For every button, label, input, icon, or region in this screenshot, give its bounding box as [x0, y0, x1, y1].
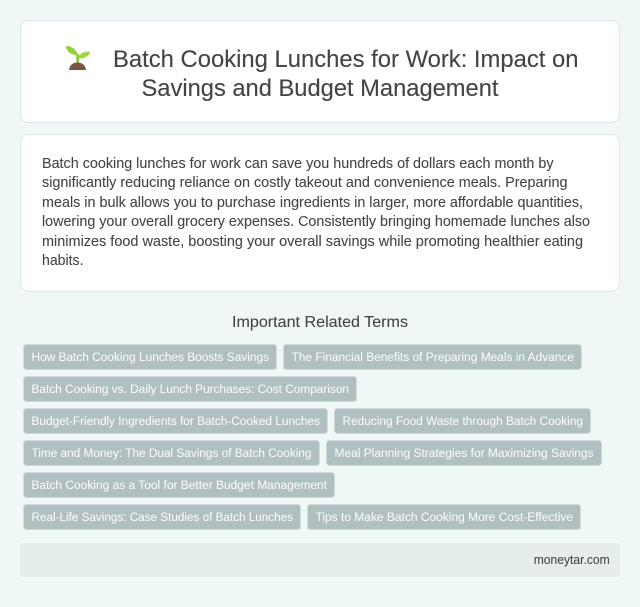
tag: Budget-Friendly Ingredients for Batch-Cooked Lunches [32, 414, 320, 428]
panel: summary card [20, 134, 620, 291]
summary paragraph: Batch cooking lunches for work can save you hundreds of dollars each month by [42, 156, 554, 172]
summary paragraph: meals in bulk allows you to purchase ingredients in larger, more affordable quantities, [42, 195, 583, 211]
tag [326, 440, 602, 466]
summary paragraph [42, 156, 590, 269]
summary paragraph: lowering your overall grocery expenses. Consistently bringing homemade lunches also [42, 214, 590, 230]
tag: Meal Planning Strategies for Maximizing Savings [334, 446, 594, 460]
panel: title card [20, 20, 620, 122]
tag: Reducing Food Waste through Batch Cooking [342, 414, 583, 428]
tag: Batch Cooking as a Tool for Better Budget Management [32, 478, 328, 492]
title: Savings and Budget Management [142, 75, 499, 102]
footer bar [20, 543, 620, 577]
tag: The Financial Benefits of Preparing Meals in Advance [292, 350, 574, 364]
tag [24, 408, 328, 434]
tag [24, 344, 276, 370]
tag [24, 504, 300, 530]
tag [24, 472, 334, 498]
tag [334, 408, 590, 434]
footer bar: moneytar.com [534, 552, 610, 567]
summary paragraph: habits. [42, 253, 84, 269]
panel: related term tags [24, 344, 602, 530]
summary paragraph: significantly reducing reliance on costly takeout and convenience meals. Preparing [42, 175, 568, 191]
tag: Tips to Make Batch Cooking More Cost-Effective [316, 510, 573, 524]
tag [308, 504, 580, 530]
heading: important related terms: Important Related Terms [232, 314, 408, 331]
tag [24, 440, 320, 466]
title: Batch Cooking Lunches for Work: Impact on [113, 46, 578, 73]
tag: Real-Life Savings: Case Studies of Batch Lunches [32, 510, 293, 524]
icon: sprout [66, 46, 90, 70]
tag: Time and Money: The Dual Savings of Batch Cooking [32, 446, 312, 460]
title [113, 46, 578, 102]
tag: Batch Cooking vs. Daily Lunch Purchases: Cost Comparison [32, 382, 349, 396]
tag: How Batch Cooking Lunches Boosts Savings [32, 350, 269, 364]
summary paragraph: minimizes food waste, boosting your overall savings while promoting healthier eating [42, 234, 583, 250]
tag [284, 344, 582, 370]
tag [24, 376, 356, 402]
